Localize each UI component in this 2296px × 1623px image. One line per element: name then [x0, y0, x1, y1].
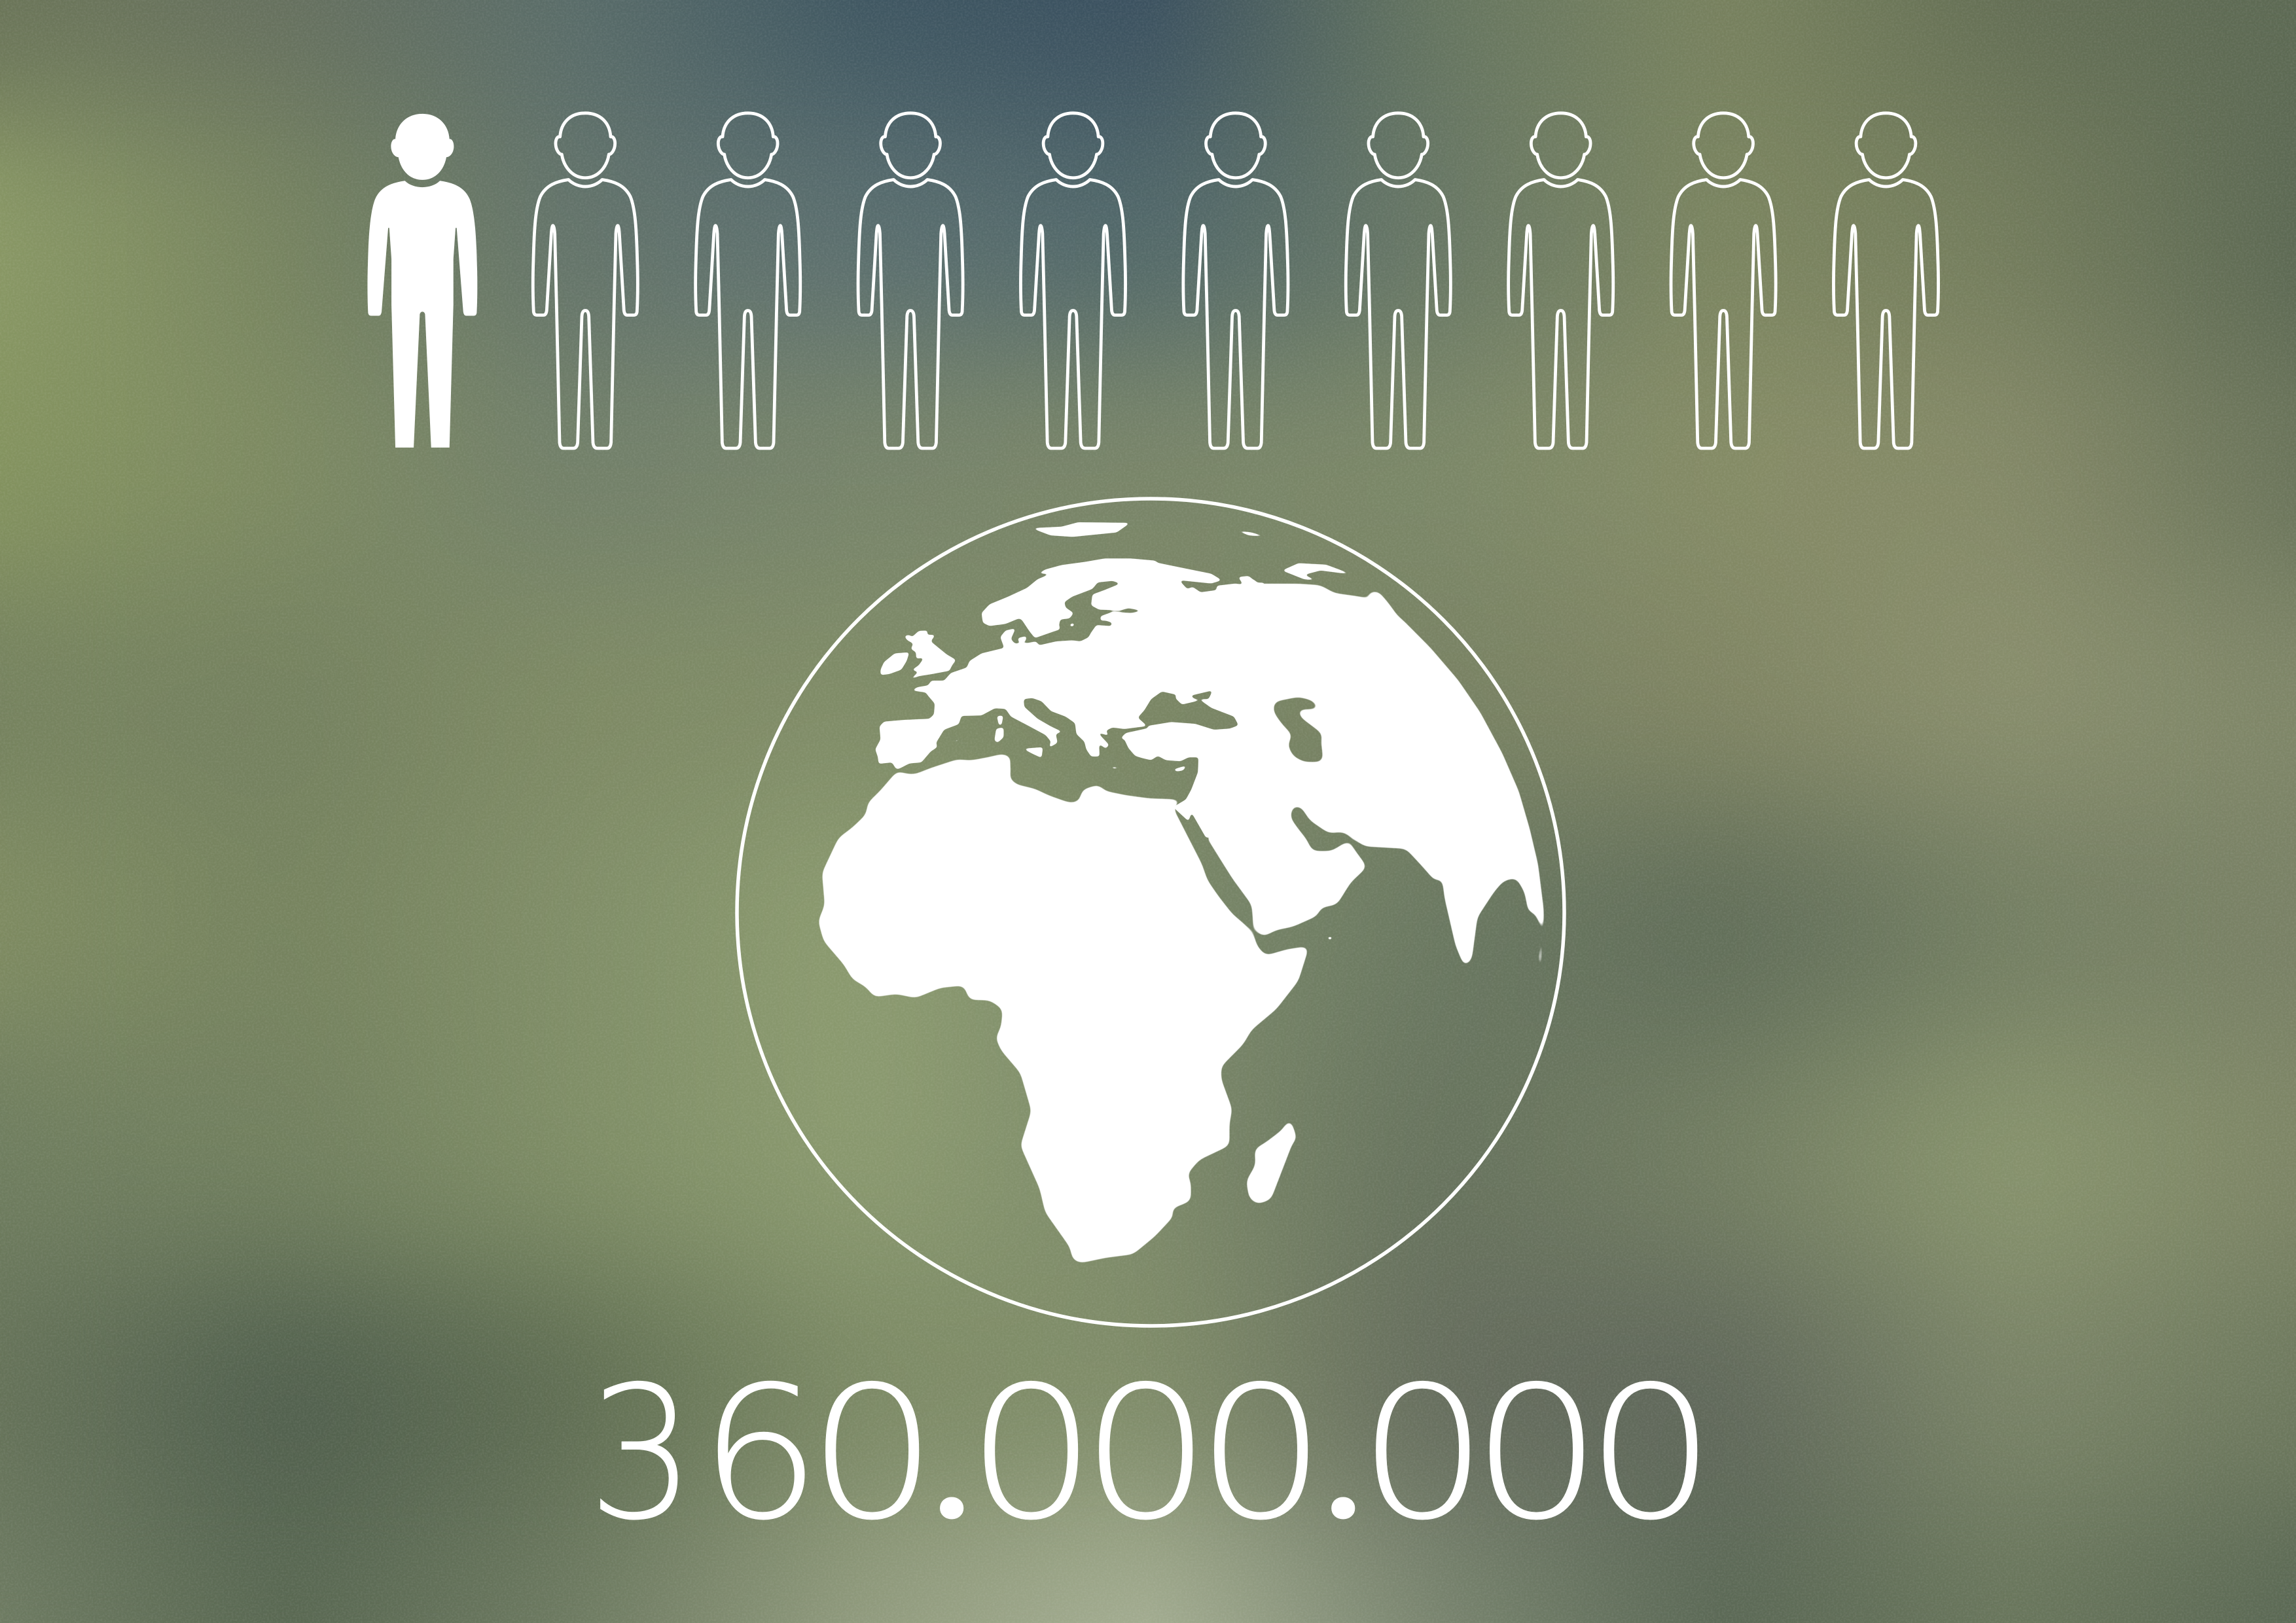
Asia, Africa and Madagascar [818, 584, 1545, 1263]
icon: outlined person 4 [858, 113, 963, 448]
icon: outlined person 8 [1509, 113, 1613, 448]
icon: filled person [367, 114, 477, 448]
big number: 0 [1471, 1347, 1602, 1561]
icon: outlined person 7 [1346, 113, 1450, 448]
icon: outlined person 6 [1183, 113, 1288, 448]
big number: 0 [1585, 1347, 1716, 1561]
big number: . [927, 1335, 977, 1563]
big number: 0 [1196, 1347, 1327, 1561]
big number: 6 [700, 1347, 821, 1561]
icon: outlined person 2 [533, 113, 637, 448]
big number: 0 [966, 1347, 1097, 1561]
globe icon [737, 499, 1564, 1326]
big number: . [1319, 1335, 1368, 1563]
icon: outlined person 10 [1833, 113, 1939, 448]
big number [588, 1335, 1716, 1563]
icon: outlined person 3 [696, 113, 800, 448]
big number: 0 [807, 1347, 938, 1561]
big number: 3 [588, 1347, 695, 1561]
Europe, Turkey, British Isles and Arctic islands [875, 522, 1354, 940]
big number: 0 [1357, 1347, 1488, 1561]
big number: 0 [1081, 1347, 1211, 1561]
icon: outlined person 9 [1671, 113, 1776, 448]
icon: outlined person 5 [1020, 113, 1126, 448]
globe outline ring [737, 499, 1564, 1326]
row of ten people: one filled, nine outlined [367, 113, 1939, 448]
